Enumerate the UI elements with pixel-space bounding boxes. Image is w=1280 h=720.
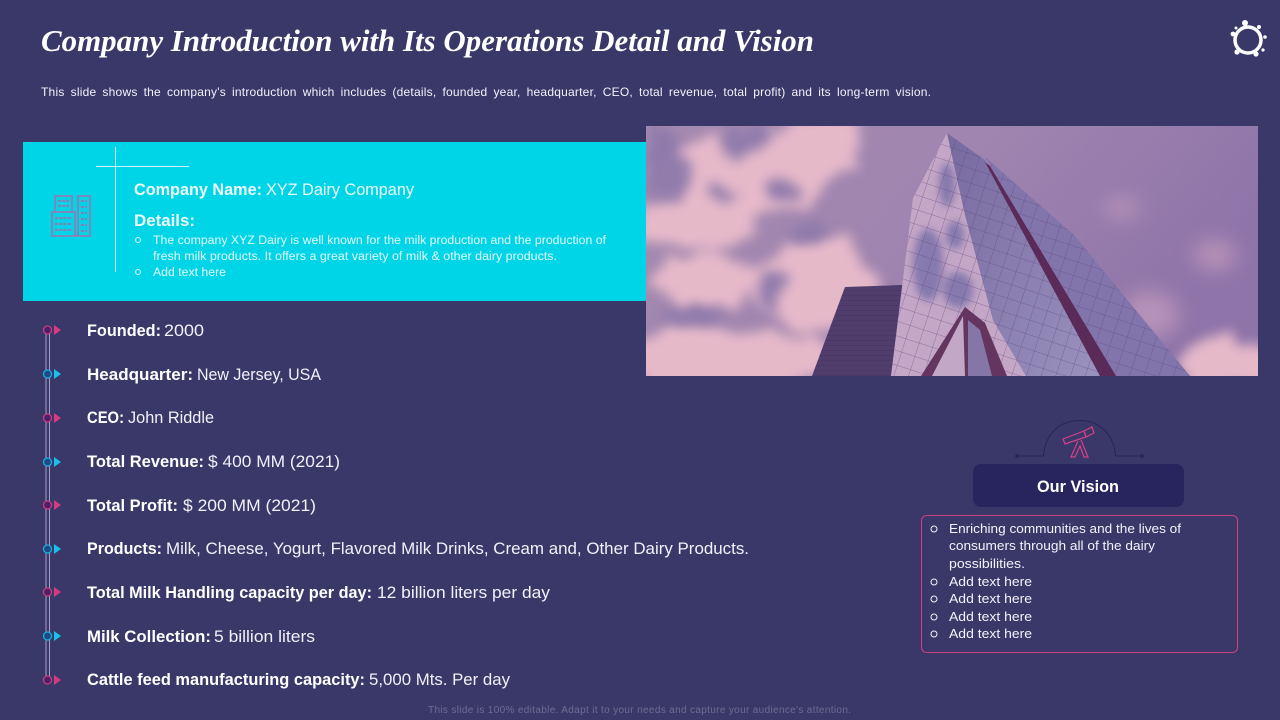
cloud masses xyxy=(646,126,1258,376)
fact: milk handling capacity: Total Milk Handling capacity per day: xyxy=(87,583,372,602)
details heading: Details: xyxy=(134,212,195,230)
icon: telescope xyxy=(1063,427,1094,457)
fact: cattle feed capacity: 5,000 Mts. Per day xyxy=(369,670,510,689)
icon: office buildings xyxy=(52,196,90,236)
fact: total revenue: Total Revenue: xyxy=(87,452,204,471)
vision bullet box: Add text here xyxy=(949,626,1032,641)
faint clouds on the right xyxy=(1104,198,1237,339)
details bullet list xyxy=(136,235,607,279)
purple sky patches in the clouds xyxy=(647,122,828,329)
vision bullet box: Add text here xyxy=(949,591,1032,606)
dark stripe xyxy=(985,162,1116,376)
fact: milk collection xyxy=(87,627,315,646)
vision heading xyxy=(973,464,1184,507)
fact: CEO xyxy=(87,408,214,427)
fact: headquarter: New Jersey, USA xyxy=(197,365,322,384)
title: Company Introduction with Its Operations Detail and Vision xyxy=(41,23,814,58)
decorative cross line xyxy=(96,147,189,272)
subtitle text: This slide shows the company's introduction which includes (details, founded year, headquarter, CEO, total revenue, total profit) and its long-term vision. xyxy=(41,85,931,99)
company name: XYZ Dairy Company xyxy=(266,181,415,199)
fact: products: Products: xyxy=(87,539,162,558)
right glass face xyxy=(985,157,1190,376)
reflective glass face xyxy=(891,133,1026,376)
fact: total profit xyxy=(87,496,316,515)
icon: logo gear xyxy=(1231,20,1267,57)
shaded glass face xyxy=(947,133,1100,376)
fact: CEO: John Riddle xyxy=(128,408,214,427)
vision heading: Our Vision xyxy=(1037,478,1119,496)
vision bullet box: consumers through all of the dairy xyxy=(949,538,1156,553)
fact: milk collection: 5 billion liters xyxy=(214,627,315,646)
vision bullet box xyxy=(922,516,1238,652)
panel: company details xyxy=(23,142,646,301)
footer note: This slide is 100% editable. Adapt it to your needs and capture your audience's attention. xyxy=(428,705,851,716)
company name: Company Name: xyxy=(134,181,262,199)
details bullet list: The company XYZ Dairy is well known for the milk production and the production of xyxy=(153,235,607,247)
fact: milk handling capacity: 12 billion liters per day xyxy=(377,583,550,602)
photo: skyscraper against a cloudy sky xyxy=(646,126,1258,376)
dome connector xyxy=(1015,420,1144,458)
company facts list xyxy=(87,321,749,689)
panel: our vision xyxy=(922,420,1238,652)
fact: headquarter: Headquarter: xyxy=(87,365,193,384)
timeline xyxy=(44,325,61,685)
fact: CEO: CEO: xyxy=(87,408,124,427)
company name xyxy=(134,181,415,199)
vision bullet box: possibilities. xyxy=(949,556,1025,571)
vision bullet box: Enriching communities and the lives of xyxy=(949,521,1181,536)
vision bullet box: Add text here xyxy=(949,609,1032,624)
small dark building xyxy=(812,285,903,376)
vision bullet box: Add text here xyxy=(949,574,1032,589)
fact: headquarter xyxy=(87,365,322,384)
fact: founded: 2000 xyxy=(164,321,204,340)
fact: milk collection: Milk Collection: xyxy=(87,627,211,646)
fact: total revenue xyxy=(87,452,340,471)
entrance triangle xyxy=(921,307,1007,376)
fact: cattle feed capacity: Cattle feed manufacturing capacity: xyxy=(87,670,365,689)
fact: total revenue: $ 400 MM (2021) xyxy=(208,452,340,471)
fact: milk handling capacity xyxy=(87,583,550,602)
fact: total profit: $ 200 MM (2021) xyxy=(183,496,316,515)
details bullet list: Add text here xyxy=(153,267,226,279)
fact: total profit: Total Profit: xyxy=(87,496,178,515)
details bullet list: fresh milk products. It offers a great variety of milk & other dairy products. xyxy=(153,251,557,263)
fact: founded: Founded: xyxy=(87,321,161,340)
fact: founded xyxy=(87,321,204,340)
fact: cattle feed capacity xyxy=(87,670,510,689)
fact: products: Milk, Cheese, Yogurt, Flavored Milk Drinks, Cream and, Other Dairy Products. xyxy=(166,539,749,558)
